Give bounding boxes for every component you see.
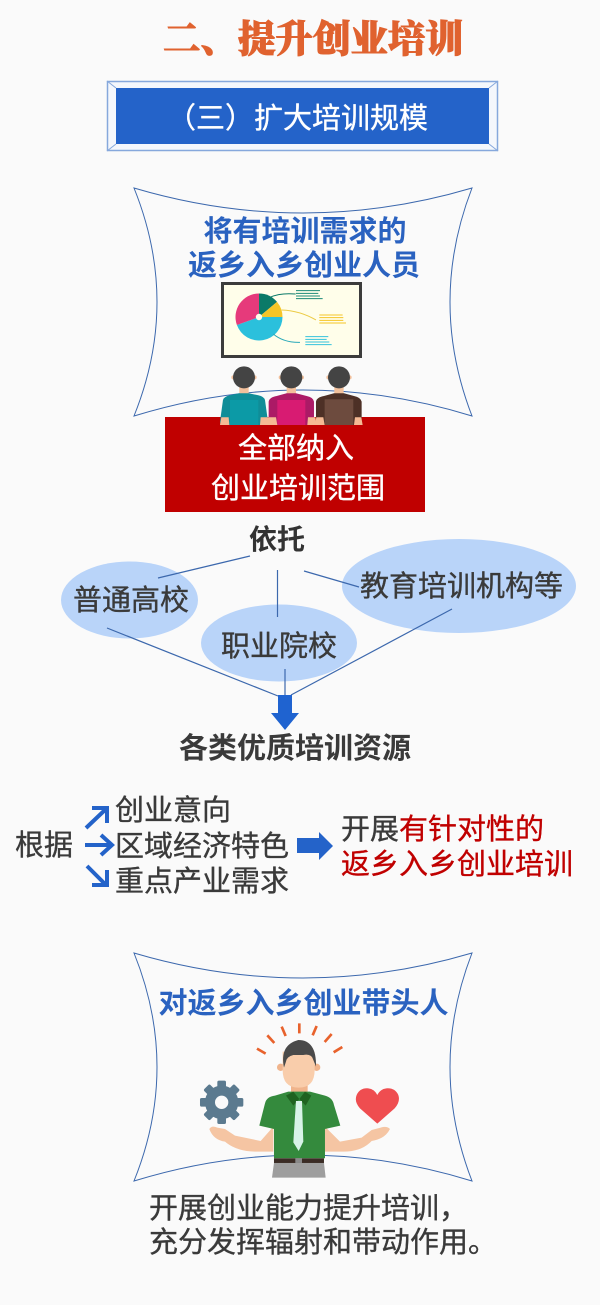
- list of bases: 重点产业需求: [115, 865, 289, 898]
- subtitle banner: [107, 81, 498, 151]
- subtitle text: （三）扩大培训规模: [167, 102, 428, 135]
- person: teal shirt: [220, 366, 271, 425]
- belt and trousers: [274, 1158, 324, 1163]
- panel: include in training scope: 创业培训范围: [211, 472, 385, 505]
- arrows: three directions: [85, 808, 112, 885]
- panel heading: leaders: 对返乡入乡创业带头人: [158, 987, 449, 1020]
- label: according to: 根据: [15, 829, 73, 862]
- ellipse: regular universities: [61, 562, 198, 638]
- rays: [257, 1023, 342, 1054]
- icon: presentation screen with pie chart: [222, 284, 360, 356]
- arrow: down to resources: [271, 695, 299, 730]
- arrow: leads to targeted training: [297, 832, 333, 860]
- list of bases: 区域经济特色: [115, 830, 289, 863]
- text: capability training: 充分发挥辐射和带动作用。: [149, 1226, 497, 1259]
- arms: [209, 1127, 273, 1152]
- panel heading: returning entrepreneurs: 返乡入乡创业人员: [188, 249, 420, 282]
- list of bases: [115, 794, 289, 898]
- panel: include in training scope: 全部纳入: [238, 432, 354, 465]
- text: targeted training: 开展有针对性的: [341, 813, 544, 846]
- panel heading: returning entrepreneurs: [188, 215, 420, 282]
- heart: [356, 1088, 399, 1124]
- title: 二、提升创业培训: [163, 19, 463, 61]
- text: capability training: [149, 1192, 497, 1259]
- text: targeted training: 返乡入乡创业培训: [341, 848, 573, 881]
- label: quality training resources: 各类优质培训资源: [179, 732, 411, 765]
- icon: leader with gear and heart: [200, 1023, 399, 1178]
- person: magenta shirt: [267, 366, 317, 425]
- shirt: [259, 1092, 340, 1158]
- head: [277, 1064, 284, 1071]
- panel: leaders frame: [134, 953, 472, 1181]
- ellipse: regular universities: 普通高校: [73, 584, 189, 617]
- label: rely on: 依托: [249, 524, 305, 555]
- ellipse: vocational colleges: 职业院校: [221, 630, 337, 663]
- ellipse: vocational colleges: [201, 604, 357, 682]
- ellipse: education and training institutions: 教育培训机构等: [360, 570, 563, 603]
- panel: training demand frame: [134, 188, 472, 416]
- person: brown shirt: [315, 366, 363, 425]
- gear: [200, 1081, 243, 1124]
- text: capability training: 开展创业能力提升培训，: [149, 1192, 468, 1225]
- ellipse: education and training institutions: [342, 539, 576, 633]
- panel heading: returning entrepreneurs: 将有培训需求的: [204, 215, 407, 248]
- text: targeted training: [341, 813, 573, 881]
- tie: [293, 1101, 303, 1151]
- icon: three seated people: [220, 366, 363, 425]
- connector lines: [107, 556, 452, 696]
- panel: include in training scope: [165, 417, 425, 512]
- list of bases: 创业意向: [115, 794, 231, 827]
